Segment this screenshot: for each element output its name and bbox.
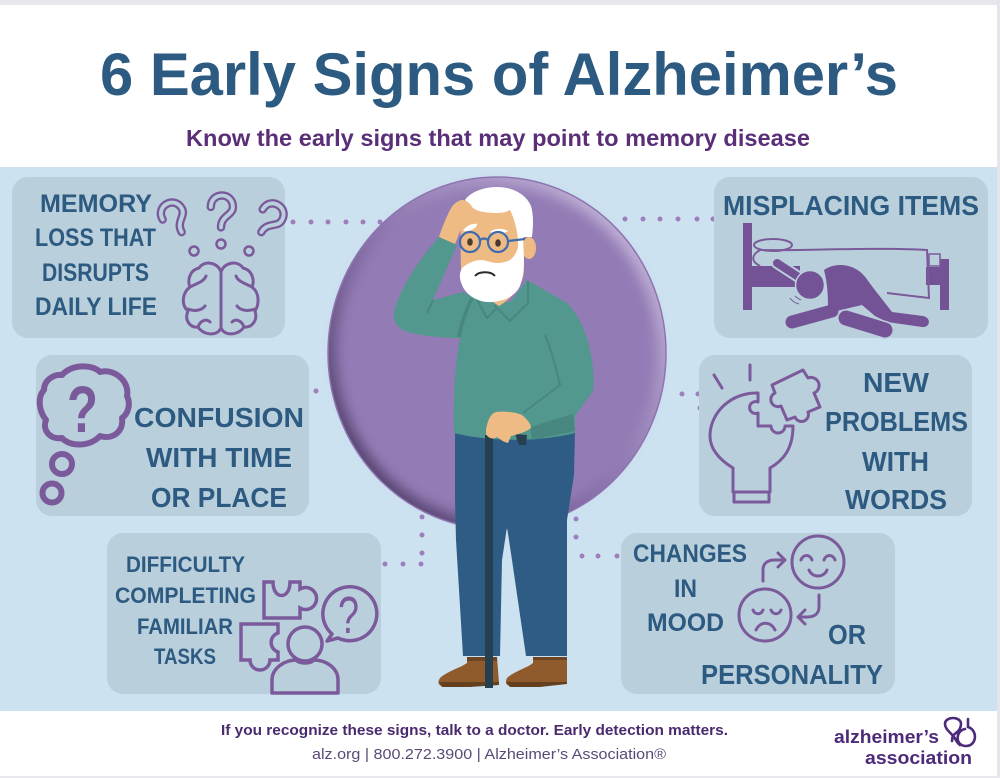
raised hand [439,200,473,244]
panel: new problems with words [699,355,972,516]
illustration: elderly man with cane [394,187,594,688]
heading: difficulty: FAMILIAR [137,614,233,639]
head [460,187,536,306]
panel: memory loss [12,177,288,338]
hair [465,187,533,240]
mouth [475,272,495,276]
heading: difficulty: TASKS [154,644,216,669]
icon: brain [183,263,258,334]
icon: lightbulb with puzzle piece [710,365,820,502]
icon: person searching under bed [743,223,949,330]
icon: question marks [157,195,288,256]
heading: memory loss: DISRUPTS [42,259,149,287]
icon: puzzle pieces and person: ? [338,587,359,645]
footer text: alz.org | 800.272.3900 | Alzheimer’s Association® [312,747,666,763]
logo: alzheimer's association [834,718,975,768]
main blue band [0,167,997,711]
heading: difficulty: DIFFICULTY [126,552,245,577]
panel: difficulty completing tasks [107,533,381,694]
panel: changes in mood [621,533,895,694]
title: 6 Early Signs of Alzheimer’s [100,41,898,108]
footer text: If you recognize these signs, talk to a doctor. Early detection matters. [221,722,728,739]
icon: thought cloud: ? [67,372,98,446]
lower hand [486,412,531,443]
icon: puzzle pieces and person [241,582,377,693]
cane [485,435,493,688]
glasses [460,232,525,252]
heading: changes in mood: IN [674,575,697,603]
heading: new problems: NEW [863,367,930,398]
heading: confusion: WITH TIME [146,442,292,473]
connector dots [290,216,716,566]
heading: new problems: WORDS [845,484,947,515]
purple circle [328,177,666,529]
heading: changes in mood: MOOD [647,609,724,637]
panel: misplacing items [714,177,988,338]
icon: mood faces with arrows [739,536,844,641]
heading: changes in mood: PERSONALITY [701,659,883,690]
eyebrows [463,224,508,233]
heading: memory loss [35,190,157,321]
footer text [221,722,728,763]
shoes [438,657,567,687]
icon: logo mark [945,718,975,746]
heading: confusion: OR PLACE [151,482,287,513]
bottom edge strip [0,776,1000,778]
subtitle: Know the early signs that may point to memory disease [186,125,810,151]
heading: difficulty: COMPLETING [115,583,256,608]
heading: new problems: PROBLEMS [825,406,968,437]
right edge strip [997,0,1000,778]
sweater folds [427,281,575,440]
eyes [467,238,473,246]
logo: alzheimer's association: association [865,748,972,768]
heading: confusion: CONFUSION [134,402,304,433]
heading: difficulty [115,552,256,669]
sweater [394,237,594,440]
heading: changes in mood [633,540,883,690]
trousers [455,430,575,656]
heading: confusion [134,402,304,513]
heading: new problems [825,367,968,515]
top edge strip [0,0,1000,5]
heading: memory loss: LOSS THAT [35,224,156,252]
icon: thought cloud [40,366,129,502]
beard [460,235,524,302]
heading: changes in mood: CHANGES [633,540,747,568]
logo: alzheimer's association: alzheimer’s [834,727,939,747]
panel: confusion [36,355,309,516]
heading: new problems: WITH [862,446,929,477]
heading: memory loss: MEMORY [40,190,152,218]
heading: misplacing items: MISPLACING ITEMS [723,190,979,221]
heading: changes in mood: OR [828,619,866,650]
heading: memory loss: DAILY LIFE [35,293,157,321]
